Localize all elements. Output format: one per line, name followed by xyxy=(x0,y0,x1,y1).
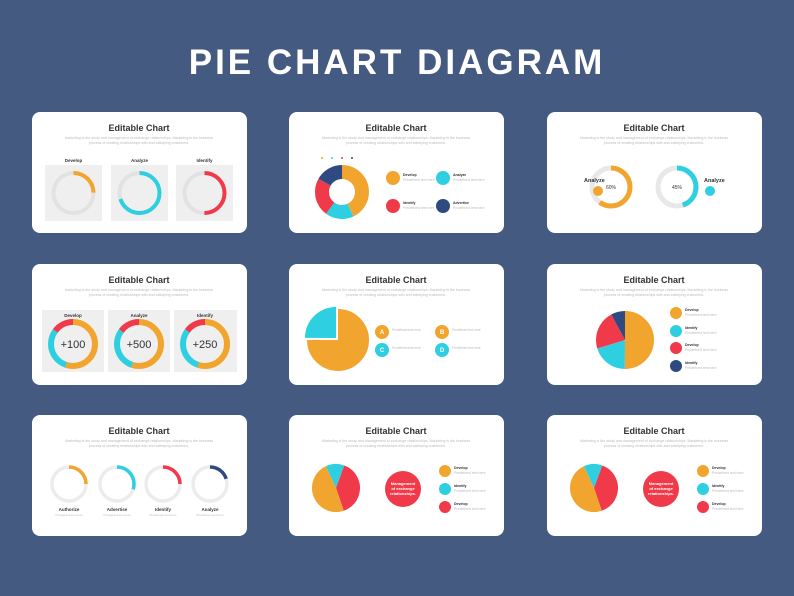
text block xyxy=(322,288,470,297)
panel: card 5 pie ABCD xyxy=(289,264,504,385)
icon list: Predefined text here xyxy=(685,348,717,352)
heading: Editable Chart xyxy=(365,426,427,436)
icon list xyxy=(697,465,744,513)
icon list: Develop xyxy=(403,173,417,177)
heading: Editable Chart xyxy=(365,275,427,285)
chart: identify xyxy=(176,158,233,221)
icon list: Predefined text here xyxy=(454,507,486,511)
icon list: Predefined text here xyxy=(454,489,486,493)
labels xyxy=(584,178,725,196)
text block: process of creating relationships with and satisfying customers. xyxy=(346,293,446,297)
callout: relationships. xyxy=(390,491,416,496)
icon list: Predefined text here xyxy=(712,471,744,475)
chart: +500: +500 xyxy=(127,339,151,351)
pie chart xyxy=(610,326,640,354)
heading: Editable Chart xyxy=(108,426,170,436)
labels: Advertise xyxy=(107,507,128,512)
icon list: Develop xyxy=(685,343,699,347)
callout xyxy=(385,471,421,507)
icon list: Predefined text here xyxy=(453,178,485,182)
callout xyxy=(643,471,679,507)
icon list xyxy=(439,465,486,513)
text block: Marketing is the study and management of exchange relationships. Marketing is the business xyxy=(322,288,470,292)
text block: process of creating relationships with and satisfying customers. xyxy=(346,444,446,448)
letter list: Predefined text here xyxy=(392,346,421,350)
text block: Marketing is the study and management of exchange relationships. Marketing is the business xyxy=(580,136,728,140)
heading: Editable Chart xyxy=(108,123,170,133)
text block: process of creating relationships with and satisfying customers. xyxy=(89,444,189,448)
icon list xyxy=(670,307,717,372)
letter list: A xyxy=(380,330,385,336)
chart: +250: +250 xyxy=(193,339,217,351)
icon list: Identify xyxy=(685,361,697,365)
chart: identify: Identify xyxy=(196,158,213,163)
chart: analyze: Analyze xyxy=(131,158,148,163)
text block: process of creating relationships with and satisfying customers. xyxy=(604,444,704,448)
chart: develop: Develop xyxy=(65,158,82,163)
text block xyxy=(322,439,470,448)
pie chart xyxy=(578,472,610,504)
icon list: Identify xyxy=(403,201,415,205)
text block: process of creating relationships with and satisfying customers. xyxy=(346,141,446,145)
labels: Analyze xyxy=(201,507,219,512)
legend xyxy=(321,157,353,159)
chart: analyze xyxy=(111,158,168,221)
callout: of exchange xyxy=(391,486,415,491)
icon list: Predefined text here xyxy=(454,471,486,475)
callout: relationships. xyxy=(648,491,674,496)
chart: +100: Develop xyxy=(64,313,82,318)
panel: card 1 rings in boxes xyxy=(32,112,247,233)
icon list: Develop xyxy=(454,502,468,506)
icon list: Identify xyxy=(454,484,466,488)
text block: Marketing is the study and management of exchange relationships. Marketing is the business xyxy=(65,136,213,140)
letter list: Predefined text here xyxy=(392,328,421,332)
heading: Editable Chart xyxy=(623,123,685,133)
heading: Editable Chart xyxy=(365,123,427,133)
text block xyxy=(580,439,728,448)
icon list: Predefined text here xyxy=(685,366,717,370)
icon list: Predefined text here xyxy=(712,507,744,511)
ring 60% xyxy=(592,168,630,206)
panel: card 3 two rings xyxy=(547,112,762,233)
labels: Predefined text here xyxy=(55,513,83,517)
chart: +500 xyxy=(108,310,170,372)
pie chart xyxy=(320,322,354,356)
labels xyxy=(55,507,224,517)
donut chart xyxy=(322,172,362,212)
text block xyxy=(65,439,213,448)
callout: Management xyxy=(391,481,416,486)
callout: of exchange xyxy=(649,486,673,491)
panel: card 4 three donuts xyxy=(32,264,247,385)
icon list: Predefined text here xyxy=(712,489,744,493)
text block xyxy=(65,288,213,297)
text block: Marketing is the study and management of exchange relationships. Marketing is the business xyxy=(322,439,470,443)
labels: Analyze xyxy=(704,178,725,184)
icon list: Identify xyxy=(685,326,697,330)
chart: +500: Analyze xyxy=(130,313,148,318)
heading: Editable Chart xyxy=(623,426,685,436)
panel: card 8 pie with callout xyxy=(289,415,504,536)
icon list: Predefined text here xyxy=(403,178,435,182)
labels: Predefined text here xyxy=(103,513,131,517)
text block xyxy=(322,136,470,145)
text block: process of creating relationships with and satisfying customers. xyxy=(89,293,189,297)
ring 45% xyxy=(658,168,696,206)
panel: card 6 pie list xyxy=(547,264,762,385)
rings xyxy=(52,467,227,501)
labels: Predefined text here xyxy=(149,513,177,517)
icon list: Identify xyxy=(712,484,724,488)
chart: +250 xyxy=(174,310,237,372)
text block: process of creating relationships with and satisfying customers. xyxy=(604,293,704,297)
chart: develop xyxy=(45,158,102,221)
text block xyxy=(580,288,728,297)
text block: Marketing is the study and management of exchange relationships. Marketing is the business xyxy=(580,439,728,443)
text block: process of creating relationships with and satisfying customers. xyxy=(89,141,189,145)
ring 60%: 60% xyxy=(606,185,617,191)
icon list: Develop xyxy=(712,466,726,470)
chart: +100: +100 xyxy=(61,339,85,351)
icon list: Predefined text here xyxy=(685,313,717,317)
heading: Editable Chart xyxy=(623,275,685,285)
icon list: Predefined text here xyxy=(685,331,717,335)
icon list: Predefined text here xyxy=(403,206,435,210)
letter list: B xyxy=(440,330,445,336)
text block xyxy=(580,136,728,145)
chart: +250: Identify xyxy=(197,313,213,318)
letter list: Predefined text here xyxy=(452,346,481,350)
icon list: Develop xyxy=(685,308,699,312)
icon list xyxy=(386,171,485,213)
text block: Marketing is the study and management of exchange relationships. Marketing is the business xyxy=(322,136,470,140)
text block: Marketing is the study and management of exchange relationships. Marketing is the business xyxy=(65,439,213,443)
icon list: Advertise xyxy=(453,201,469,205)
panel: card 9 pie with callout xyxy=(547,415,762,536)
labels: Analyze xyxy=(584,178,605,184)
labels: Authorize xyxy=(59,507,80,512)
icon list: Develop xyxy=(712,502,726,506)
letter list: Predefined text here xyxy=(452,328,481,332)
letter list xyxy=(375,325,481,357)
pie chart xyxy=(320,472,352,504)
letter list: D xyxy=(440,348,445,354)
text block: Marketing is the study and management of exchange relationships. Marketing is the business xyxy=(580,288,728,292)
panel: card 2 donut xyxy=(289,112,504,233)
text block xyxy=(65,136,213,145)
title: PIE CHART DIAGRAM xyxy=(189,43,605,82)
labels: Identify xyxy=(155,507,171,512)
panel: card 7 four rings xyxy=(32,415,247,536)
labels: Predefined text here xyxy=(196,513,224,517)
letter list: C xyxy=(380,348,385,354)
ring 45%: 45% xyxy=(672,185,683,191)
chart: +100 xyxy=(42,310,104,372)
icon list: Develop xyxy=(454,466,468,470)
icon list: Predefined text here xyxy=(453,206,485,210)
callout: Management xyxy=(649,481,674,486)
text block: Marketing is the study and management of exchange relationships. Marketing is the business xyxy=(65,288,213,292)
text block: process of creating relationships with and satisfying customers. xyxy=(604,141,704,145)
icon list: Analyze xyxy=(453,173,466,177)
heading: Editable Chart xyxy=(108,275,170,285)
